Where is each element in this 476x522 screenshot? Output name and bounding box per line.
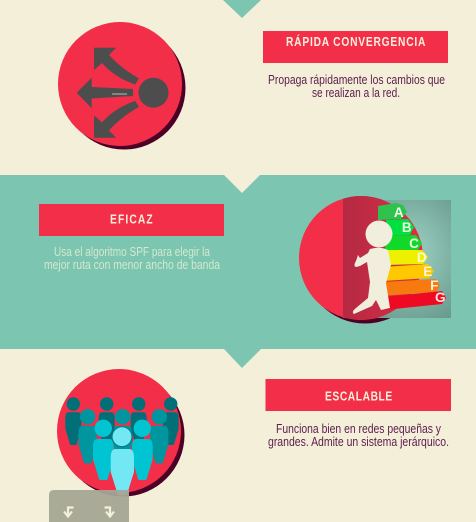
icon: left turn arrow bbox=[64, 508, 74, 516]
text block: rápida convergencia bbox=[268, 72, 445, 100]
energy bars A to G: E bbox=[423, 264, 432, 279]
icon: right turn arrow bbox=[104, 508, 114, 516]
text block: eficaz: Usa el algoritmo SPF para elegir la bbox=[54, 244, 211, 259]
text block: escalable bbox=[268, 421, 449, 449]
heading bar: rápida convergencia: RÁPIDA CONVERGENCIA bbox=[286, 35, 425, 49]
energy bars A to G: D bbox=[417, 250, 427, 265]
text block: rápida convergencia: se realizan a la red. bbox=[312, 85, 400, 100]
icon: group of people in red circle bbox=[57, 369, 184, 496]
text block: eficaz: mejor ruta con menor ancho de banda bbox=[44, 257, 221, 272]
energy bars A to G: B bbox=[402, 220, 412, 235]
front row people bbox=[93, 420, 153, 480]
energy bars A to G: F bbox=[430, 278, 438, 293]
panel: escalable bbox=[57, 369, 451, 496]
lead person bbox=[111, 426, 134, 495]
icon: branching arrows in red circle bbox=[58, 22, 186, 150]
icon: energy rating with figure in red circle bbox=[299, 196, 451, 324]
heading bar: escalable bbox=[266, 379, 451, 411]
text block: eficaz bbox=[44, 244, 221, 272]
energy bars A to G: A bbox=[394, 205, 404, 220]
white figure bbox=[353, 220, 392, 314]
heading bar: eficaz: EFICAZ bbox=[110, 214, 153, 227]
heading bar: eficaz bbox=[39, 204, 224, 236]
panel: eficaz teal band bbox=[0, 175, 476, 368]
heading bar: escalable: ESCALABLE bbox=[325, 391, 393, 404]
back row people bbox=[65, 397, 179, 445]
middle row people bbox=[78, 409, 168, 463]
heading bar: rápida convergencia bbox=[263, 31, 448, 63]
panel: rápida convergencia bbox=[58, 22, 448, 150]
top teal pointer bbox=[223, 0, 261, 18]
toolbar with undo and redo arrows bbox=[49, 490, 129, 522]
energy bars A to G bbox=[378, 203, 446, 310]
energy bars A to G: G bbox=[435, 290, 446, 305]
energy bars A to G: C bbox=[409, 236, 419, 251]
